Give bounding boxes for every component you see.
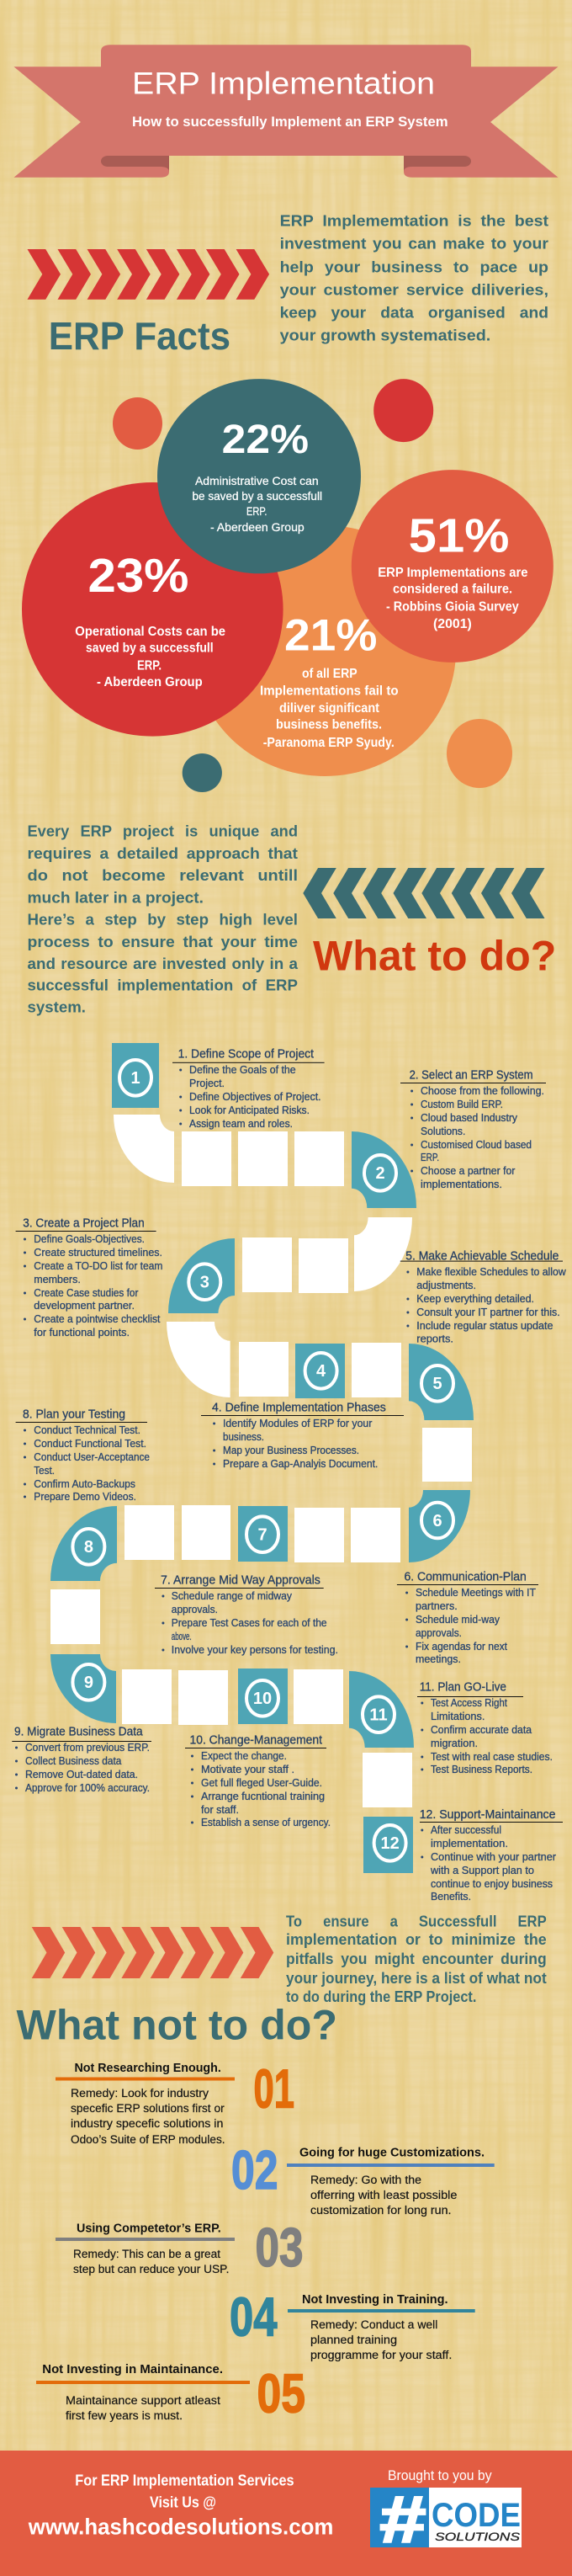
pitfall 04: proggramme for your staff. <box>310 2349 452 2361</box>
pitfall 04 <box>230 2286 475 2361</box>
curve: step 2 <box>352 1131 416 1208</box>
intro paragraph <box>280 213 548 343</box>
decorative dot orange <box>447 719 512 788</box>
brought to you by: Brought to you by <box>388 2467 492 2483</box>
paragraph: what to do intro: Here’s a step by step high level <box>27 912 298 929</box>
step 2 text: Custom Build ERP. <box>421 1099 503 1110</box>
orange chevron arrows <box>32 1927 273 1978</box>
step 6 text: partners. <box>416 1600 458 1612</box>
step 3 text: for functional points. <box>34 1327 130 1339</box>
step 5 text: adjustments. <box>416 1280 476 1291</box>
tile: step 10 <box>238 1669 288 1724</box>
step 1 text: Assign team and roles. <box>189 1118 293 1130</box>
bubble: 51 percent: ERP Implementations are <box>378 566 528 580</box>
tile: step 7 <box>238 1506 288 1562</box>
step 4 text: 4. Define Implementation Phases <box>212 1402 386 1415</box>
step 12 text: 12. Support-Maintainance <box>420 1808 555 1822</box>
step 1 text <box>172 1048 325 1130</box>
curve: step 3 <box>168 1238 235 1313</box>
paragraph: what to do intro <box>27 822 299 1016</box>
intro paragraph: ERP Implememtation is the best <box>280 213 548 230</box>
intro paragraph: your growth systematised. <box>280 327 490 343</box>
step 2 text: Choose from the following. <box>421 1085 544 1097</box>
tile: step 12 <box>363 1817 413 1873</box>
pitfall 04: 04 <box>230 2286 278 2347</box>
ribbon fold right <box>404 156 471 172</box>
step 2 text: implementations. <box>421 1179 502 1190</box>
step 6 text: Schedule mid-way <box>416 1614 500 1626</box>
bubble: 23 percent: Operational Costs can be <box>75 625 225 639</box>
pitfall 01 <box>56 2057 294 2146</box>
curve: step 2: 2 <box>375 1164 385 1183</box>
footer call to action: Visit Us @ <box>150 2494 216 2511</box>
road tiles row 4 right <box>294 1508 400 1562</box>
paragraph: what not to do intro: implementation or to minimize the <box>286 1931 547 1948</box>
bubble: 21 percent <box>193 525 456 776</box>
step 12 text: After successful <box>431 1824 501 1836</box>
step 5 text: Make flexible Schedules to allow <box>416 1266 567 1278</box>
step 9 text: Remove Out-dated data. <box>25 1769 138 1780</box>
step 3 text: development partner. <box>34 1300 135 1312</box>
curve: step 8: 8 <box>84 1538 93 1557</box>
step 11 text: Limitations. <box>431 1711 485 1722</box>
pitfall 01: specefic ERP solutions first or <box>71 2102 225 2115</box>
step 6 text: Fix agendas for next <box>416 1641 507 1653</box>
step 2 text: ERP. <box>421 1152 439 1163</box>
paragraph: what to do intro: system. <box>27 999 86 1016</box>
tile: step 4 <box>295 1344 345 1398</box>
bubble text: 21 percent: 21% <box>284 610 377 660</box>
step 12 text: Benefits. <box>431 1891 471 1903</box>
pitfall 05: Maintainance support atleast <box>66 2394 220 2407</box>
bubble: 23 percent: - Aberdeen Group <box>97 675 203 689</box>
step 5 text <box>400 1250 567 1344</box>
step 3 text: Create Case studies for <box>34 1287 138 1299</box>
step 11 text: Confirm accurate data <box>431 1724 532 1736</box>
step 9 text: 9. Migrate Business Data <box>14 1726 143 1739</box>
pitfall 05: Not Investing in Maintainance. <box>42 2363 223 2376</box>
step 11 text: Test with real case studies. <box>431 1751 553 1763</box>
step 10 text: 10. Change-Management <box>190 1734 322 1748</box>
curve: step 11 <box>349 1671 414 1748</box>
paragraph: what to do intro: process to ensure that your time <box>27 934 298 950</box>
heading: ERP Facts: ERP Facts <box>49 314 230 358</box>
tile: step 1: 1 <box>130 1069 140 1088</box>
bubble: 23 percent: 23% <box>87 549 188 603</box>
step 1 text: 1. Define Scope of Project <box>178 1048 314 1062</box>
heading: What not to do?: What not to do? <box>17 2001 337 2048</box>
pitfall 04: planned training <box>310 2334 397 2346</box>
logo: code solutions: CODE <box>432 2497 521 2534</box>
pitfall 01: Remedy: Look for industry <box>71 2087 209 2100</box>
road tile vertical <box>422 1428 472 1482</box>
step 8 text: Test. <box>34 1465 55 1477</box>
curve: step 6 <box>409 1490 470 1562</box>
step 9 text: Convert from previous ERP. <box>25 1742 150 1754</box>
pitfall 02: 02 <box>231 2139 278 2201</box>
pitfall 02: Going for huge Customizations. <box>299 2147 485 2160</box>
step 1 text: Project. <box>189 1078 225 1089</box>
footer call to action <box>28 2472 333 2540</box>
logo: code solutions: # <box>379 2482 426 2556</box>
step 4 text: business. <box>223 1431 264 1443</box>
step 5 text: 5. Make Achievable Schedule <box>405 1250 559 1264</box>
bubble: 23 percent <box>22 482 283 737</box>
road path diagram <box>50 1043 474 1873</box>
pitfall 01: Odoo’s Suite of ERP modules. <box>71 2133 225 2146</box>
bubble: 22 percent <box>157 379 361 573</box>
step 2 text: Solutions. <box>421 1126 465 1137</box>
step 10 text: Establish a sense of urgency. <box>201 1817 331 1828</box>
curve: step 6: 6 <box>432 1512 442 1530</box>
logo: code solutions <box>370 2482 522 2556</box>
step 8 text: Prepare Demo Videos. <box>34 1491 136 1503</box>
step 11 text: Test Business Reports. <box>431 1764 532 1775</box>
step 8 text: Conduct Functional Test. <box>34 1438 146 1450</box>
step 2 text <box>400 1069 546 1190</box>
step 7 text: Prepare Test Cases for each of the <box>172 1617 327 1629</box>
step 7 text: Schedule range of midway <box>172 1590 293 1602</box>
pitfall 02: offerring with least possible <box>310 2189 457 2201</box>
paragraph: what to do intro: requires a detailed approach that <box>27 845 298 862</box>
step 9 text <box>12 1726 151 1794</box>
step 2 text: Choose a partner for <box>421 1165 515 1177</box>
step 8 text: Confirm Auto-Backups <box>34 1478 135 1490</box>
pitfall 05: first few years is must. <box>66 2409 183 2422</box>
heading: What to do?: What to do? <box>313 933 556 980</box>
bubble: 23 percent: saved by a successfull <box>86 641 214 655</box>
curve: step 9: 9 <box>84 1674 93 1692</box>
teal chevron arrows <box>303 868 545 918</box>
pitfall 03: 03 <box>256 2217 303 2278</box>
pitfall 02 <box>231 2139 495 2217</box>
paragraph: what not to do intro: pitfalls you might encounter during <box>286 1951 547 1967</box>
step 11 text: migration. <box>431 1738 478 1749</box>
facts bubbles <box>22 379 553 792</box>
bubble: 51 percent: (2001) <box>433 617 472 631</box>
road curve 3 <box>167 1322 230 1397</box>
tile: step 1 <box>112 1043 159 1108</box>
step 3 text: Create structured timelines. <box>34 1247 162 1259</box>
intro paragraph: keep your data organised and <box>280 305 548 322</box>
pitfall 03 <box>56 2217 303 2278</box>
step 6 text: approvals. <box>416 1627 462 1639</box>
road tiles row 1 <box>182 1131 344 1186</box>
step 12 text <box>420 1808 563 1903</box>
bubble: 23 percent: ERP. <box>137 658 162 673</box>
decorative dot red <box>373 379 433 442</box>
step 11 text: Test Access Right <box>431 1697 507 1709</box>
curve: step 9 <box>50 1654 116 1723</box>
bubble text: 21 percent: -Paranoma ERP Syudy. <box>263 736 395 750</box>
pitfall 05 <box>36 2362 305 2424</box>
road tile before step 12 <box>363 1753 412 1807</box>
title: ERP Implementation <box>132 67 435 101</box>
step 1 text: Look for Anticipated Risks. <box>189 1104 310 1116</box>
step 3 text <box>16 1217 162 1339</box>
step 10 text: Expect the change. <box>201 1750 287 1762</box>
pitfall 01: industry specefic solutions in <box>71 2117 223 2130</box>
footer band <box>0 2451 572 2576</box>
pitfall 02: Remedy: Go with the <box>310 2174 421 2186</box>
step 2 text: Cloud based Industry <box>421 1112 518 1124</box>
bubble: 51 percent: 51% <box>409 509 509 563</box>
paragraph: what to do intro: Every ERP project is unique and <box>27 822 298 839</box>
tile: step 12: 12 <box>380 1834 400 1853</box>
step 6 text: Schedule Meetings with IT <box>416 1587 536 1599</box>
step 3 text: Define Goals-Objectives. <box>34 1233 145 1245</box>
pitfall 04: Remedy: Conduct a well <box>310 2318 437 2331</box>
road tiles row 4 left <box>124 1505 230 1560</box>
paragraph: what not to do intro <box>286 1913 547 2005</box>
step 12 text: implementation. <box>431 1838 508 1850</box>
step 4 text: Map your Business Processes. <box>223 1445 359 1456</box>
intro paragraph: investment you can make to your <box>280 236 548 253</box>
step 10 text: Motivate your staff . <box>201 1764 294 1775</box>
bubble: 51 percent: considered a failure. <box>393 583 512 597</box>
pitfall 01: 01 <box>254 2057 294 2120</box>
step 1 text: Define Objectives of Project. <box>189 1091 321 1103</box>
bubble: 51 percent: - Robbins Gioia Survey <box>386 600 519 615</box>
road tile left vertical <box>50 1589 100 1644</box>
step 12 text: continue to enjoy business <box>431 1878 553 1890</box>
step 3 text: members. <box>34 1274 81 1285</box>
pitfall 03: Remedy: This can be a great <box>73 2248 220 2260</box>
bubble text: 21 percent <box>260 610 399 750</box>
road curve 2 <box>354 1217 412 1291</box>
step 7 text: approvals. <box>172 1604 218 1615</box>
paragraph: what not to do intro: To ensure a Successfull ERP <box>286 1913 547 1929</box>
bubble: 51 percent <box>352 470 553 663</box>
step 9 text: Collect Business data <box>25 1755 121 1767</box>
step 4 text <box>201 1402 404 1470</box>
paragraph: what to do intro: and resource are invested only in a <box>27 955 299 972</box>
step 11 text: 11. Plan GO-Live <box>420 1681 506 1695</box>
step 3 text: Create a TO-DO list for team <box>34 1260 162 1272</box>
title banner <box>13 45 559 178</box>
tile: step 10: 10 <box>253 1690 272 1708</box>
step 7 text <box>155 1574 338 1656</box>
step 2 text: Customised Cloud based <box>421 1139 532 1151</box>
road tiles row 5 left <box>122 1669 228 1725</box>
step 5 text: Include regular status update <box>416 1320 553 1332</box>
step 3 text: Create a pointwise checklist <box>34 1313 161 1325</box>
bubble: 22 percent: 22% <box>222 418 309 462</box>
bubble: 22 percent: - Aberdeen Group <box>210 520 305 534</box>
step 6 text: 6. Communication-Plan <box>404 1571 527 1584</box>
red chevron arrows <box>27 249 269 300</box>
curve: step 8 <box>50 1506 117 1581</box>
bubble: 22 percent: ERP. <box>246 504 267 518</box>
bubble text: 21 percent: Implementations fail to <box>260 684 399 699</box>
road tile row 5 right <box>294 1669 343 1724</box>
step 1 text: Define the Goals of the <box>189 1064 296 1076</box>
step 12 text: with a Support plan to <box>430 1865 534 1876</box>
paragraph: what to do intro: much later in a project. <box>27 890 204 907</box>
step 8 text: Conduct Technical Test. <box>34 1424 140 1436</box>
decorative dot orange-red <box>113 397 162 450</box>
road tile row 3 left <box>239 1342 289 1397</box>
step 10 text: for staff. <box>201 1804 239 1816</box>
curve: step 3: 3 <box>200 1273 209 1291</box>
step 7 text: 7. Arrange Mid Way Approvals <box>161 1574 320 1588</box>
footer call to action: www.hashcodesolutions.com <box>28 2515 333 2540</box>
ribbon fold left <box>101 156 169 172</box>
step 6 text: meetings. <box>416 1653 461 1665</box>
bubble text: 21 percent: business benefits. <box>276 718 382 732</box>
step 7 text: Involve your key persons for testing. <box>172 1644 338 1656</box>
pitfall 05: 05 <box>257 2362 305 2424</box>
road curve 1 <box>114 1115 174 1183</box>
road tile row 3 right <box>352 1343 401 1397</box>
paragraph: what to do intro: do not become relevant untill <box>27 867 298 884</box>
bubble: 22 percent: Administrative Cost can <box>195 474 319 487</box>
logo: code solutions: SOLUTIONS <box>435 2530 521 2543</box>
step 8 text: 8. Plan your Testing <box>23 1408 125 1422</box>
ribbon shape <box>13 45 559 178</box>
curve: step 11: 11 <box>369 1706 388 1724</box>
step 4 text: Identify Modules of ERP for your <box>223 1418 372 1429</box>
intro paragraph: help your business to pace up <box>280 259 548 276</box>
curve: step 5: 5 <box>432 1375 442 1393</box>
bubble text: 21 percent: of all ERP <box>302 667 358 681</box>
step 10 text <box>185 1734 331 1828</box>
intro paragraph: your customer service diliveries, <box>280 282 548 299</box>
bubble text: 21 percent: diliver significant <box>279 701 379 716</box>
step 5 text: Consult your IT partner for this. <box>416 1307 560 1318</box>
footer call to action: For ERP Implementation Services <box>75 2472 294 2489</box>
bubble: 22 percent: be saved by a successfull <box>192 489 322 503</box>
pitfall 04: Not Investing in Training. <box>302 2293 448 2307</box>
decorative dot teal <box>183 753 222 792</box>
paragraph: what not to do intro: to do during the ERP Project. <box>286 1988 476 2005</box>
pitfall 02: customization for long run. <box>310 2204 451 2217</box>
step 6 text <box>397 1571 538 1665</box>
road tiles row 2 <box>242 1237 348 1293</box>
paragraph: what to do intro: successful implementation of ERP <box>27 977 298 994</box>
step 9 text: Approve for 100% accuracy. <box>25 1782 150 1794</box>
step 5 text: reports. <box>416 1333 453 1344</box>
curve: step 5 <box>409 1344 474 1420</box>
step 12 text: Continue with your partner <box>431 1851 556 1863</box>
step 8 text: Conduct User-Acceptance <box>34 1451 150 1463</box>
pitfall 03: Using Competetor’s ERP. <box>77 2222 221 2236</box>
step 2 text: 2. Select an ERP System <box>410 1069 533 1083</box>
pitfall 03: step but can reduce your USP. <box>73 2263 229 2275</box>
step 5 text: Keep everything detailed. <box>416 1293 534 1305</box>
step 8 text <box>16 1408 150 1503</box>
step 7 text: above. <box>172 1631 192 1642</box>
subtitle: How to successfully Implement an ERP System <box>132 114 448 130</box>
pitfall 01: Not Researching Enough. <box>74 2062 221 2075</box>
step 3 text: 3. Create a Project Plan <box>23 1217 145 1231</box>
tile: step 4: 4 <box>316 1362 326 1381</box>
step 10 text: Get full fleged User-Guide. <box>201 1777 322 1789</box>
paragraph: what not to do intro: your journey, here is a list of what not <box>286 1970 547 1987</box>
tile: step 7: 7 <box>257 1525 267 1544</box>
step 11 text <box>417 1681 553 1775</box>
step 10 text: Arrange fucntional training <box>201 1791 325 1802</box>
step 4 text: Prepare a Gap-Analyis Document. <box>223 1458 378 1470</box>
